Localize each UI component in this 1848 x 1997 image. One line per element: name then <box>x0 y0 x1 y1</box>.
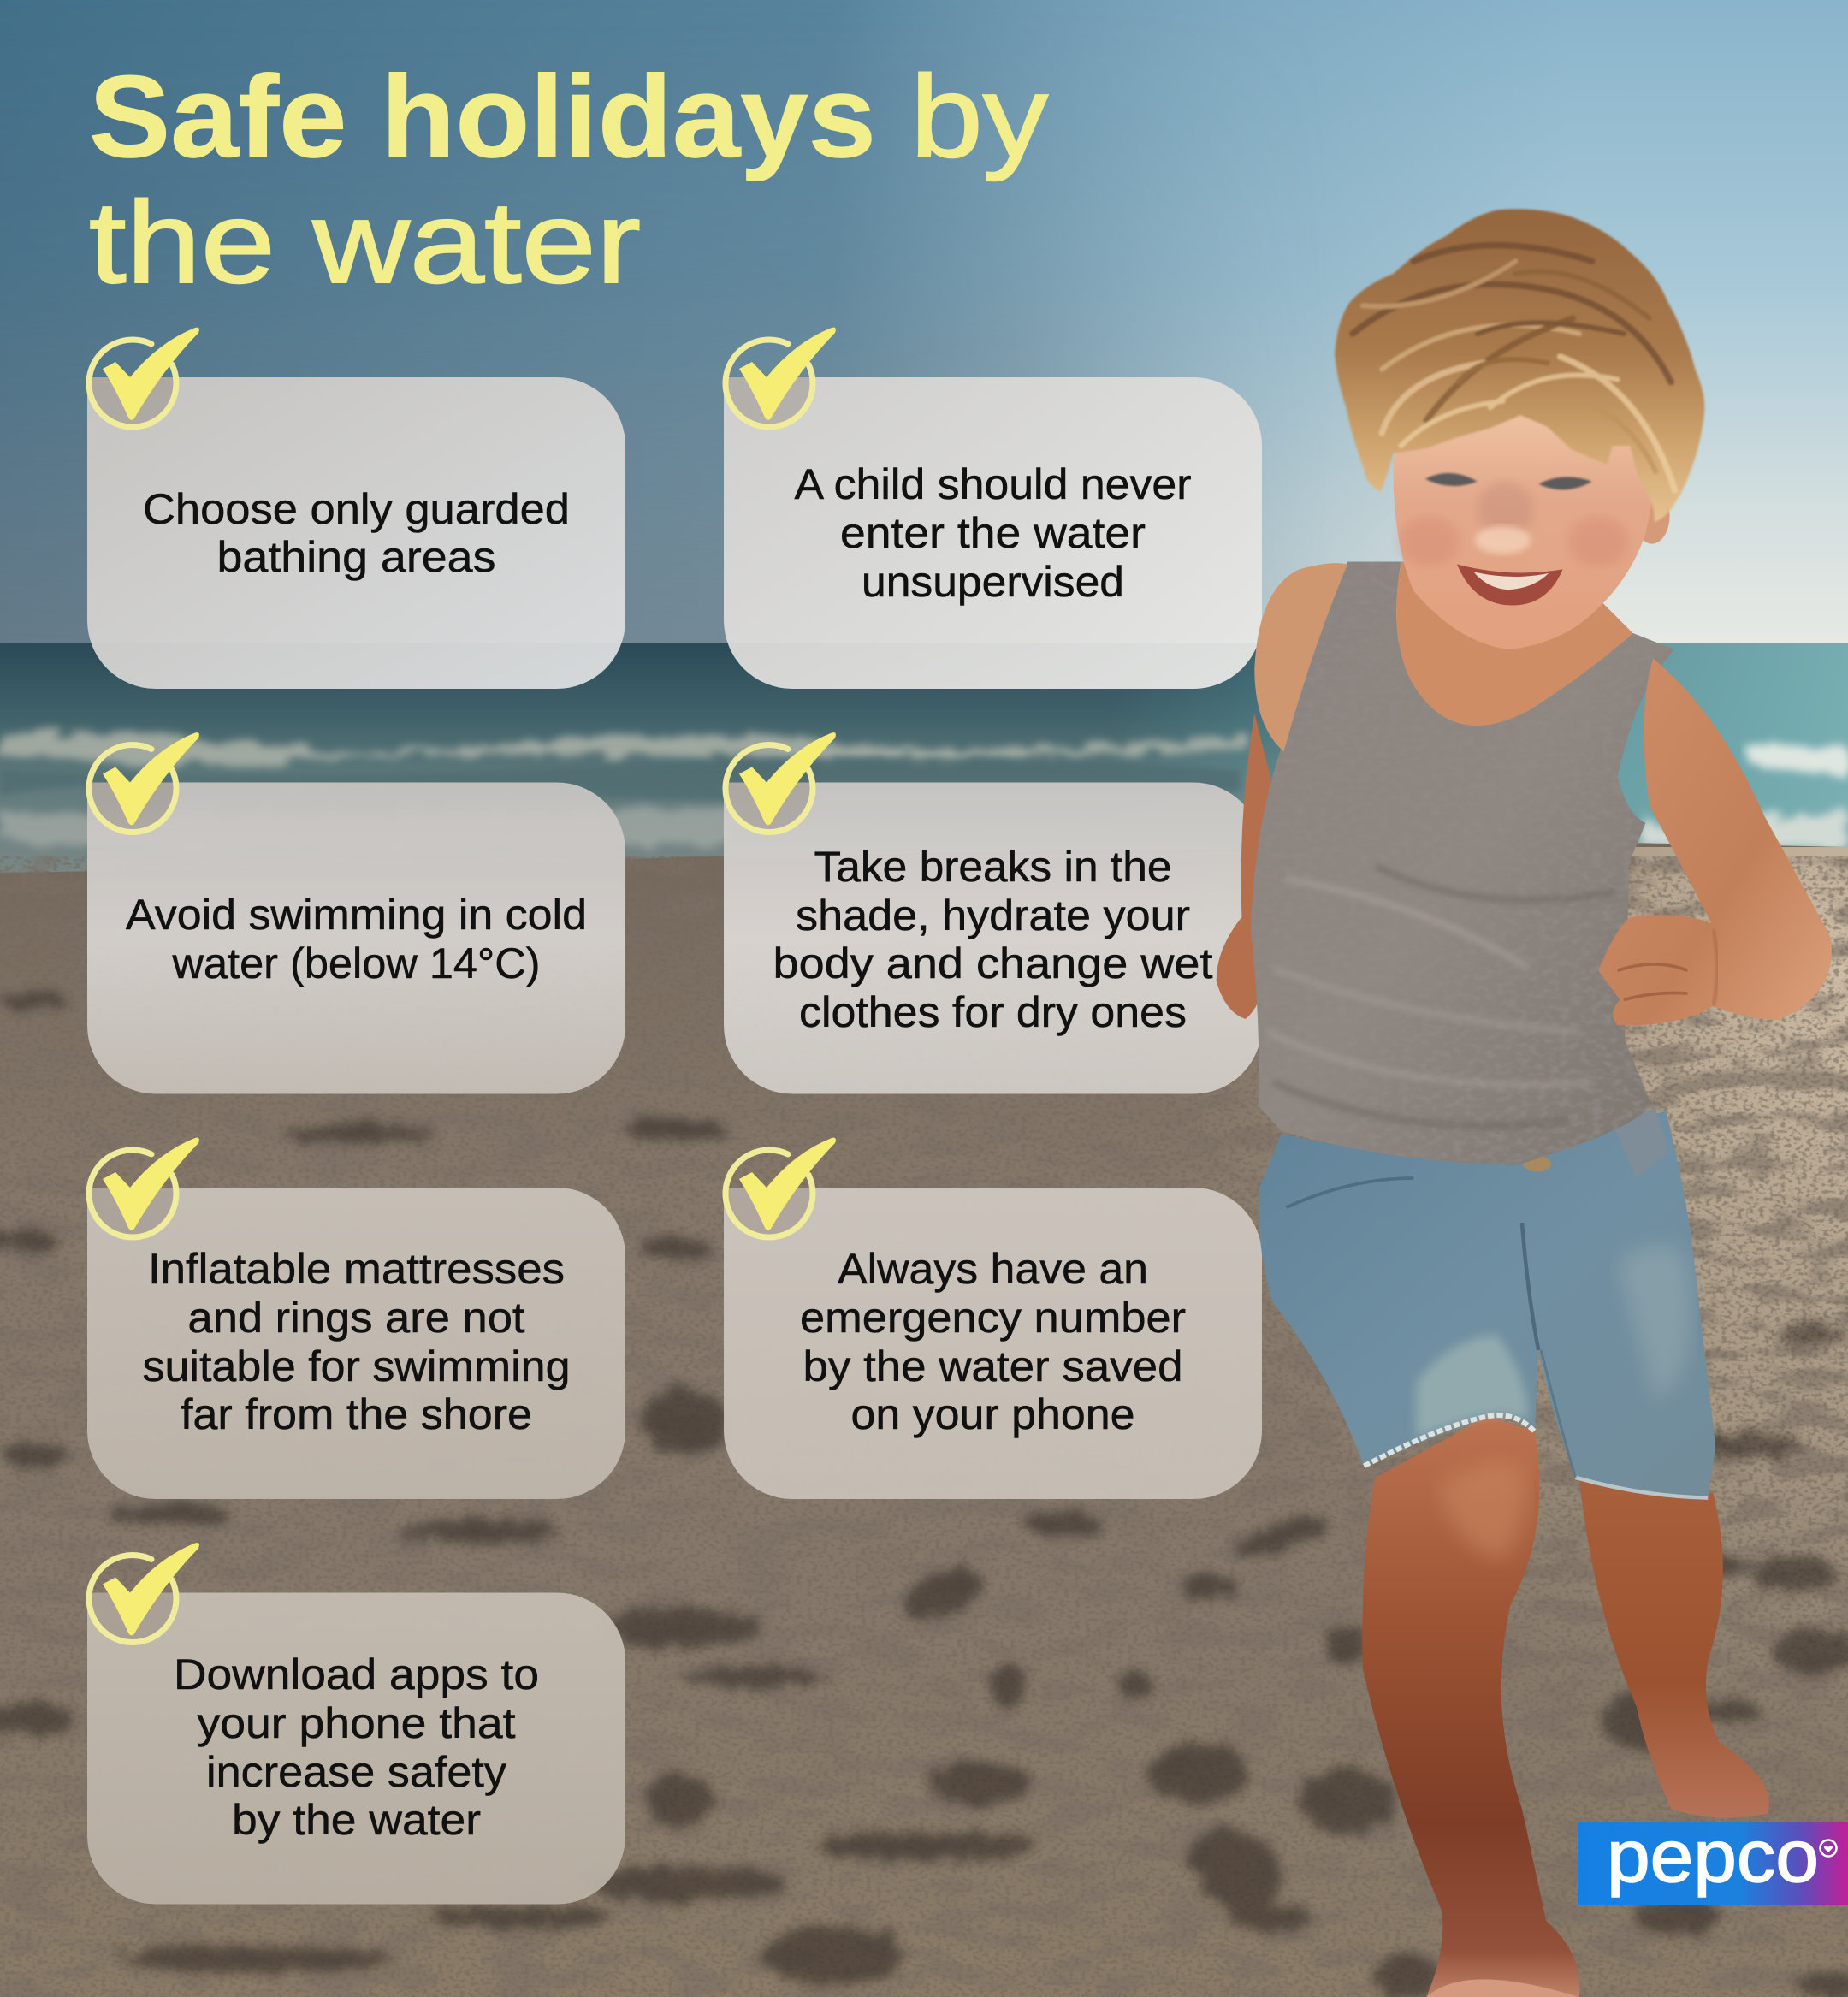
smile <box>1457 564 1563 605</box>
sky <box>0 0 1848 643</box>
card text: body and change wet <box>773 939 1213 987</box>
icon: check mark <box>726 328 836 428</box>
far leg <box>1579 1478 1769 1818</box>
card text: by the water saved <box>803 1342 1182 1390</box>
sand <box>0 843 1848 1997</box>
near leg <box>1362 1416 1580 1997</box>
card text <box>142 1245 570 1438</box>
hair <box>1335 209 1704 522</box>
card text: far from the shore <box>181 1390 532 1438</box>
card text: Take breaks in the <box>814 843 1172 891</box>
title line 2: the water <box>89 177 641 307</box>
card text: Choose only guarded <box>143 485 570 533</box>
title: by <box>910 51 1048 181</box>
tank top <box>1251 561 1675 1165</box>
near arm and hand <box>1598 659 1832 1025</box>
face <box>1393 394 1670 649</box>
near shoulder <box>1254 563 1348 751</box>
card text <box>126 891 587 987</box>
card text: and rings are not <box>188 1294 525 1342</box>
card: inflatable mattresses <box>87 1138 625 1499</box>
card text: increase safety <box>206 1748 506 1796</box>
icon: check mark <box>89 732 199 833</box>
card text: water (below 14°C) <box>171 939 541 987</box>
card: breaks in the shade <box>724 732 1262 1093</box>
card text: Avoid swimming in cold <box>126 891 587 939</box>
title line 1: Safe holidays <box>89 51 876 181</box>
card text: Always have an <box>838 1245 1148 1293</box>
card text <box>794 460 1191 606</box>
card: cold water <box>87 732 625 1093</box>
card: emergency number <box>724 1138 1262 1499</box>
card text: clothes for dry ones <box>799 988 1187 1036</box>
card text: on your phone <box>850 1390 1134 1438</box>
title <box>89 51 1048 307</box>
face shading <box>1478 482 1533 537</box>
card text: Inflatable mattresses <box>148 1245 565 1293</box>
card text: bathing areas <box>217 533 496 581</box>
far arm <box>1217 714 1274 1019</box>
card text: emergency number <box>800 1294 1186 1342</box>
card: safety apps <box>87 1543 625 1905</box>
card text: your phone that <box>197 1699 516 1747</box>
card: never unsupervised <box>724 328 1262 689</box>
card text: by the water <box>232 1796 481 1844</box>
icon: check mark <box>89 1543 199 1643</box>
near foot highlight <box>1426 1979 1579 1997</box>
card text: enter the water <box>840 509 1146 557</box>
card text <box>773 843 1213 1036</box>
logo heart badge <box>1821 1840 1836 1857</box>
eyes <box>1425 473 1478 486</box>
card text <box>174 1650 539 1844</box>
sand footprints and shadows <box>0 993 1848 1997</box>
sea <box>0 643 1848 892</box>
card text: unsupervised <box>862 558 1124 606</box>
card text: A child should never <box>794 460 1191 508</box>
card text: suitable for swimming <box>142 1342 570 1390</box>
card text <box>800 1245 1186 1438</box>
icon: check mark <box>89 1138 199 1238</box>
icon: check mark <box>89 328 199 428</box>
card text: shade, hydrate your <box>796 892 1190 939</box>
card text: Download apps to <box>174 1650 539 1698</box>
logo: pepco <box>1578 1816 1848 1905</box>
icon: check mark <box>726 1138 836 1238</box>
icon: check mark <box>726 732 836 833</box>
denim shorts <box>1259 1108 1715 1498</box>
logo: pepco: pepco <box>1607 1816 1819 1898</box>
neck and chest <box>1396 560 1632 726</box>
boy running on the beach <box>1217 209 1832 1997</box>
card text <box>143 485 570 581</box>
card: guarded bathing areas <box>87 328 625 689</box>
